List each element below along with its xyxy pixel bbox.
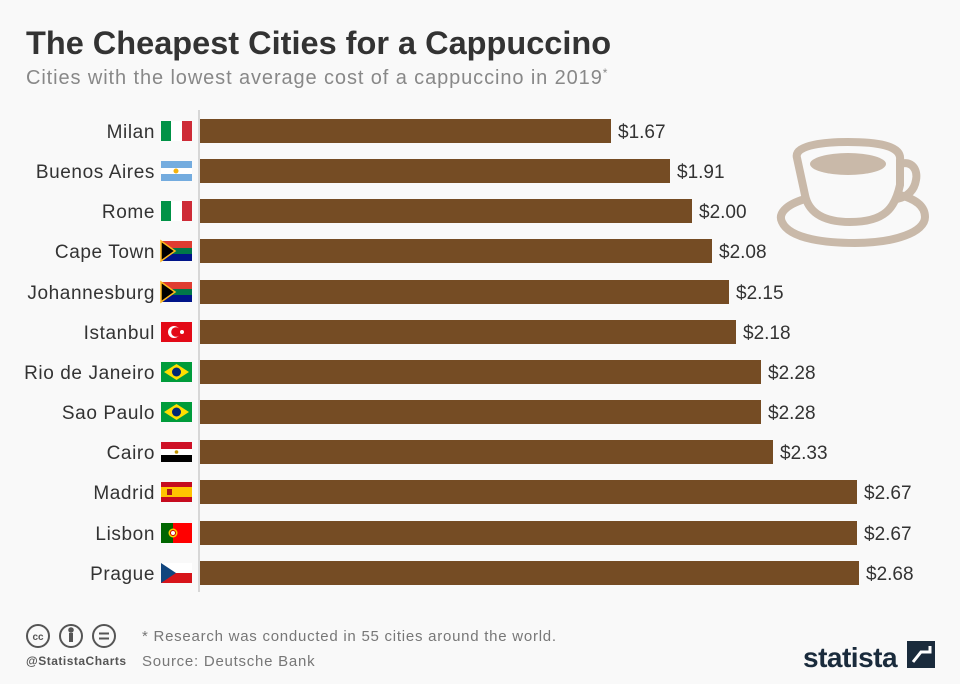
bar chart: $2.08 [719,242,767,263]
bar chart: Buenos Aires [36,162,155,183]
bar chart: $2.68 [866,564,914,585]
bar chart: Prague [90,564,155,585]
bar chart: $2.67 [864,483,912,504]
icon: coffee cup [781,142,925,243]
subtitle: * [603,66,608,80]
bar chart: Rio de Janeiro [24,363,155,384]
icon: creative commons [27,625,115,647]
bar chart: $2.28 [768,363,816,384]
footnote: * Research was conducted in 55 cities around the world. [142,628,557,645]
bar chart: Cape Town [55,242,155,263]
source: Source: Deutsche Bank [142,653,315,670]
bar chart: $2.15 [736,283,784,304]
bar chart: $2.18 [743,323,791,344]
bar chart [24,119,914,585]
bar chart: Sao Paulo [62,403,155,424]
bar chart: Rome [102,202,155,223]
handle: @StatistaCharts [26,654,127,668]
bar chart: $1.67 [618,122,666,143]
bar chart: $2.67 [864,524,912,545]
bar chart: $1.91 [677,162,725,183]
bar chart: $2.00 [699,202,747,223]
bar chart: Istanbul [84,323,155,344]
bar chart: Madrid [93,483,155,504]
bar chart: Cairo [107,443,155,464]
bar chart: Lisbon [95,524,155,545]
subtitle: Cities with the lowest average cost of a cappuccino in 2019 [26,67,603,89]
bar chart: $2.33 [780,443,828,464]
title: The Cheapest Cities for a Cappuccino [26,25,611,61]
bar chart: Milan [107,122,155,143]
bar chart: $2.28 [768,403,816,424]
bar chart: Johannesburg [27,283,155,304]
icon: creative commons: cc [32,632,44,643]
axis line [198,110,200,592]
statista logo: statista [803,642,898,673]
statista logo [803,641,935,673]
